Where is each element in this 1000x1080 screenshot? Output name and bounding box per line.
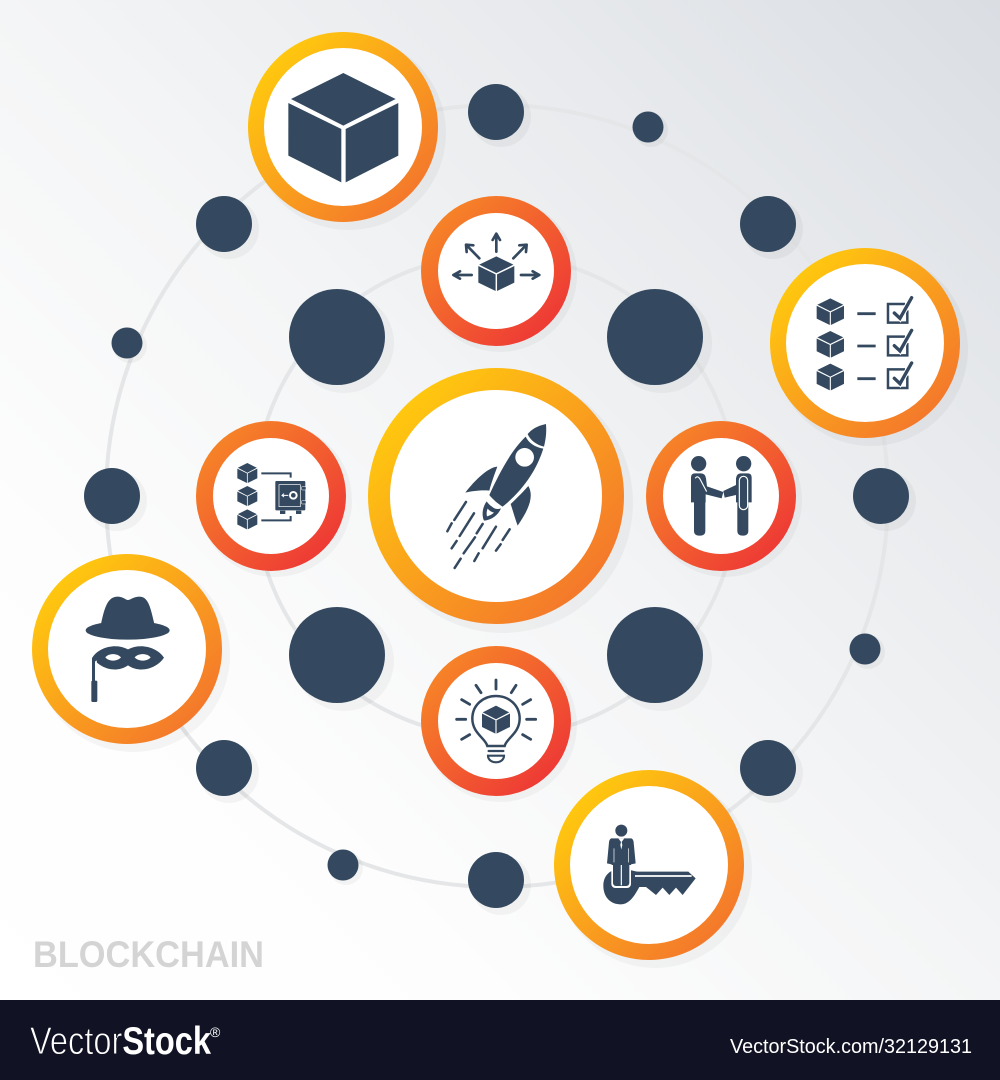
icon: light bulb with cube xyxy=(457,680,536,762)
icon: blocks checklist xyxy=(817,298,912,390)
footer id: VectorStock.com/32129131 xyxy=(730,1036,972,1058)
badge: handshake xyxy=(646,421,802,577)
badge: hat and mask xyxy=(32,554,230,752)
badge: cube with arrows xyxy=(421,196,577,352)
large dots on inner ring xyxy=(289,289,712,711)
outer connecting ring xyxy=(106,105,888,887)
badge: checklist xyxy=(770,248,968,446)
icon: cube xyxy=(288,73,398,182)
icon: anonymous hat and mask xyxy=(86,597,170,702)
icon: cube with five arrows xyxy=(453,234,539,291)
badge: idea bulb with cube xyxy=(421,646,577,802)
badge: blocks to safe xyxy=(196,421,352,577)
footer bar xyxy=(0,1000,1000,1080)
icon: businessman standing on key xyxy=(603,825,696,904)
title: BLOCKCHAIN xyxy=(33,934,264,975)
badge: big cube xyxy=(248,32,446,230)
registered mark: ® xyxy=(210,1024,221,1040)
inner connecting ring xyxy=(255,255,737,737)
icon: rocket xyxy=(447,424,546,568)
icon: three blocks linked to a safe xyxy=(237,463,306,529)
icon: two people shaking hands xyxy=(691,456,752,536)
medium dots on outer ring xyxy=(84,84,916,915)
badge: person on key xyxy=(554,770,752,968)
footer logo: VectorStock xyxy=(30,1020,211,1063)
central badge: rocket xyxy=(368,368,633,633)
small dots on outer ring xyxy=(112,112,885,885)
